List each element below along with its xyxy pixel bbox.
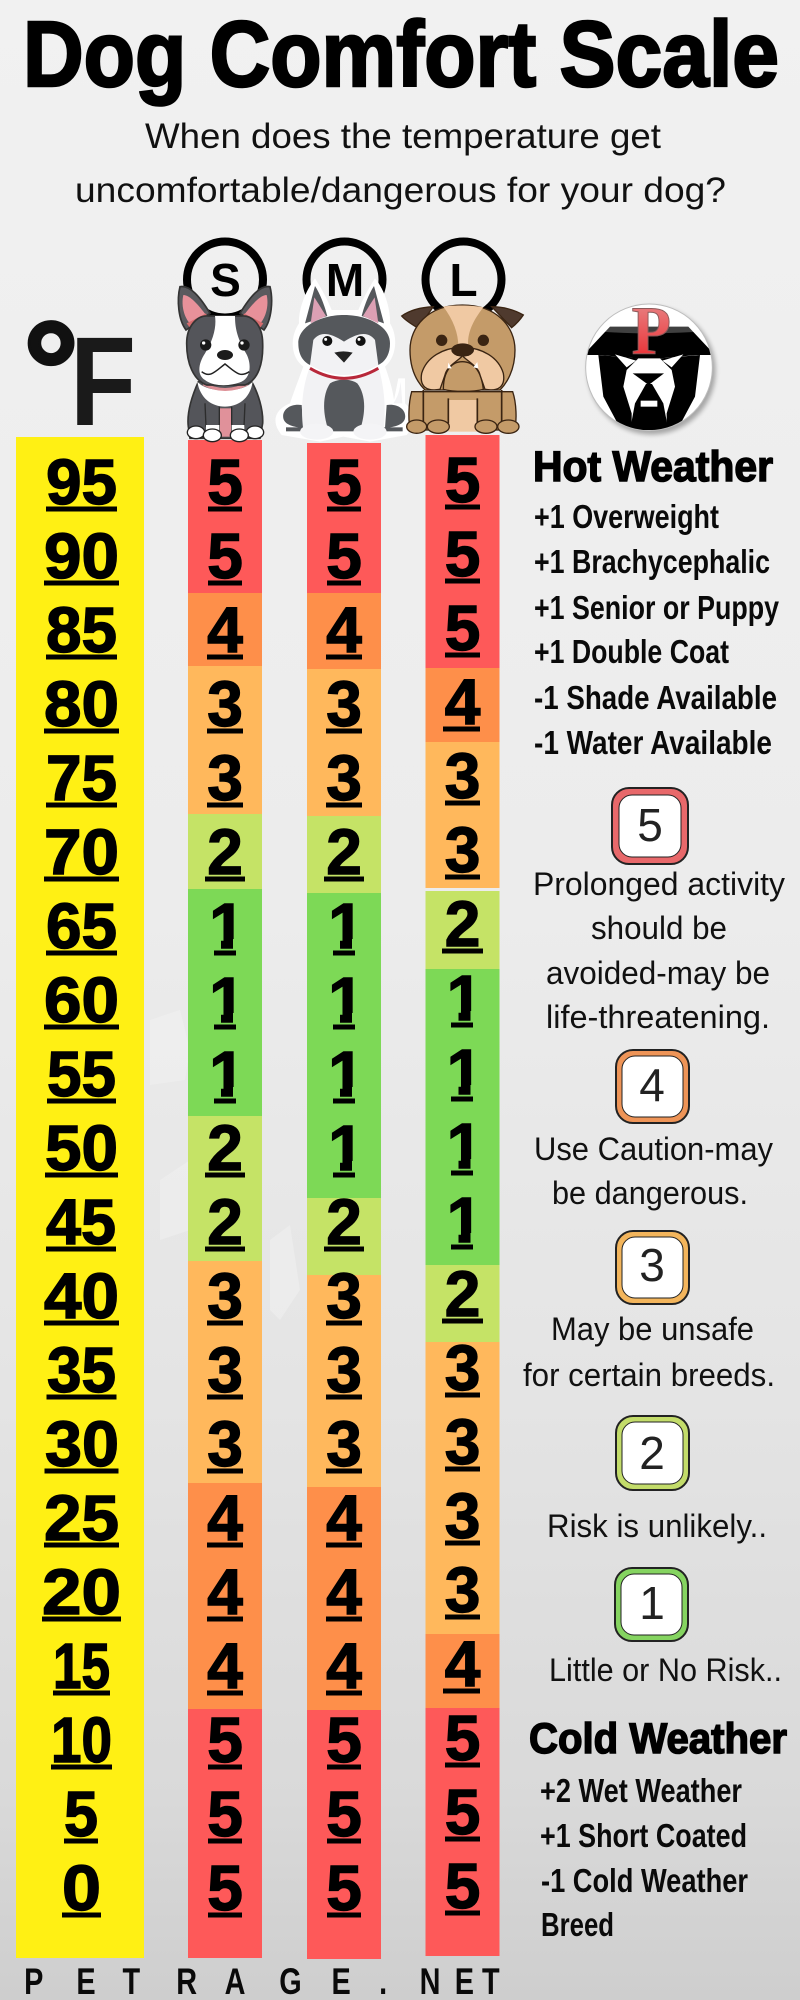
column: medium dogs: 5 xyxy=(326,1778,362,1850)
column: medium dogs: 5 xyxy=(326,1704,362,1776)
column: medium dogs: 3 xyxy=(326,1408,362,1480)
legend: level 1: 1 xyxy=(639,1577,665,1629)
panel: hot weather modifiers xyxy=(533,443,780,761)
column: large dogs: 3 xyxy=(445,740,480,812)
column: small dogs: 1 xyxy=(209,1038,245,1110)
subtitle xyxy=(75,117,726,210)
column: large dogs: 1 xyxy=(447,962,482,1034)
legend: level 3: for certain breeds. xyxy=(523,1357,775,1393)
column: small dogs: 5 xyxy=(207,1704,243,1776)
column: large dogs: 3 xyxy=(445,1554,480,1626)
panel: hot weather modifiers: +1 Double Coat xyxy=(534,633,729,670)
legend: level 4: Use Caution-may xyxy=(534,1131,773,1167)
temperature column xyxy=(16,437,144,1958)
temperature column: 55 xyxy=(47,1038,116,1110)
icon: large dog xyxy=(402,305,523,433)
size badges S M L: S xyxy=(210,254,241,306)
column: medium dogs: 3 xyxy=(326,1260,362,1332)
column: large dogs: 3 xyxy=(445,1332,480,1404)
column: small dogs: 5 xyxy=(207,446,243,518)
legend: level 5: life-threatening. xyxy=(546,999,770,1035)
legend: level 4: be dangerous. xyxy=(552,1175,748,1211)
temperature column: 65 xyxy=(46,890,117,962)
column: large dogs: 4 xyxy=(445,666,481,738)
unit: degrees Fahrenheit: ° xyxy=(23,292,79,449)
legend: level 5: avoided-may be xyxy=(546,955,770,991)
column: medium dogs: 2 xyxy=(326,816,362,888)
temperature column: 80 xyxy=(44,668,119,740)
legend: level 1 xyxy=(549,1568,782,1688)
subtitle: uncomfortable/dangerous for your dog? xyxy=(75,171,726,210)
column: small dogs: 3 xyxy=(207,742,243,814)
column: large dogs: 5 xyxy=(445,1850,480,1922)
column: small dogs: 4 xyxy=(207,594,243,666)
column: small dogs: 5 xyxy=(207,1778,243,1850)
icon: small dog xyxy=(178,287,272,442)
column: medium dogs: 4 xyxy=(326,1556,362,1628)
column: small dogs: 5 xyxy=(207,1852,243,1924)
legend: level 3: May be unsafe xyxy=(551,1311,754,1347)
temperature column: 30 xyxy=(45,1408,119,1480)
legend: level 4: 4 xyxy=(639,1059,665,1111)
column: medium dogs: 3 xyxy=(326,1334,362,1406)
temperature column: 70 xyxy=(44,816,119,888)
heading: hot weather: Hot Weather xyxy=(533,443,773,491)
column: large dogs: 1 xyxy=(447,1184,482,1256)
temperature column: 45 xyxy=(46,1186,116,1258)
temperature column: 5 xyxy=(64,1778,98,1850)
column: large dogs: 1 xyxy=(447,1110,482,1182)
legend: level 5 xyxy=(533,788,785,1035)
temperature column: 40 xyxy=(44,1260,119,1332)
column: small dogs: 5 xyxy=(207,520,243,592)
size badges S M L xyxy=(187,242,502,318)
temperature column: 0 xyxy=(62,1852,101,1924)
column: medium dogs: 1 xyxy=(328,964,364,1036)
panel: cold weather modifiers xyxy=(529,1715,787,1943)
legend: level 5: should be xyxy=(591,910,727,946)
column: small dogs: 3 xyxy=(207,1408,243,1480)
column: small dogs: 4 xyxy=(207,1556,243,1628)
column: small dogs: 3 xyxy=(207,1260,243,1332)
temperature column: 60 xyxy=(44,964,119,1036)
column: small dogs: 1 xyxy=(209,890,245,962)
legend: level 5: 5 xyxy=(637,799,663,851)
column: medium dogs: 1 xyxy=(328,890,364,962)
temperature column: 85 xyxy=(46,594,117,666)
temperature column: 25 xyxy=(44,1482,119,1554)
column: large dogs: 3 xyxy=(445,814,480,886)
legend: level 2: 2 xyxy=(639,1427,665,1479)
column: medium dogs: 3 xyxy=(326,742,362,814)
legend: level 3 xyxy=(523,1231,775,1393)
legend: level 2: Risk is unlikely.. xyxy=(547,1508,767,1544)
column: large dogs: 5 xyxy=(445,1776,480,1848)
column: large dogs: 4 xyxy=(445,1628,481,1700)
temperature column: 50 xyxy=(45,1112,118,1184)
column: small dogs: 4 xyxy=(207,1482,243,1554)
column: large dogs xyxy=(426,435,500,1956)
size badges S M L: L xyxy=(449,254,478,306)
temperature column: 15 xyxy=(53,1630,110,1702)
column: medium dogs: 1 xyxy=(328,1038,364,1110)
temperature column: 90 xyxy=(44,520,119,592)
column: large dogs: 5 xyxy=(445,444,480,516)
temperature column: 75 xyxy=(46,742,117,814)
column: large dogs: 1 xyxy=(447,1036,482,1108)
legend: level 1: Little or No Risk.. xyxy=(549,1652,782,1688)
column: small dogs: 4 xyxy=(207,1630,243,1702)
column: large dogs: 5 xyxy=(445,518,480,590)
column: small dogs: 1 xyxy=(209,964,245,1036)
heading: cold weather: Cold Weather xyxy=(529,1715,787,1763)
column: medium dogs: 2 xyxy=(326,1186,362,1258)
unit: degrees Fahrenheit: F xyxy=(70,311,136,452)
temperature column: 35 xyxy=(47,1334,116,1406)
size badges S M L: M xyxy=(326,254,364,306)
column: small dogs: 2 xyxy=(207,1186,243,1258)
column: medium dogs: 4 xyxy=(326,1482,362,1554)
icon: medium dog xyxy=(275,278,413,442)
column: medium dogs xyxy=(307,443,381,1959)
panel: hot weather modifiers: +1 Overweight xyxy=(534,498,719,535)
legend: level 5: Prolonged activity xyxy=(533,866,785,902)
logo: bulldog badge: P xyxy=(632,292,671,368)
temperature column: 95 xyxy=(46,446,117,518)
temperature column: 10 xyxy=(51,1704,112,1776)
column: large dogs: 3 xyxy=(445,1406,480,1478)
column: small dogs xyxy=(188,440,262,1958)
column: medium dogs: 1 xyxy=(328,1112,364,1184)
column: large dogs: 3 xyxy=(445,1480,480,1552)
column: medium dogs: 5 xyxy=(326,1852,362,1924)
column: medium dogs: 4 xyxy=(326,594,362,666)
column: small dogs: 3 xyxy=(207,1334,243,1406)
column: large dogs: 5 xyxy=(445,592,480,664)
column: small dogs: 2 xyxy=(207,1112,243,1184)
panel: cold weather modifiers: +2 Wet Weather xyxy=(540,1772,742,1809)
subtitle: When does the temperature get xyxy=(145,117,661,156)
legend: level 3: 3 xyxy=(639,1239,665,1291)
column: small dogs: 2 xyxy=(207,816,243,888)
panel: cold weather modifiers: -1 Cold Weather xyxy=(541,1862,748,1899)
panel: cold weather modifiers: +1 Short Coated xyxy=(540,1817,747,1854)
column: medium dogs: 5 xyxy=(326,520,362,592)
legend: level 4 xyxy=(534,1050,773,1211)
column: small dogs: 3 xyxy=(207,668,243,740)
unit: degrees Fahrenheit xyxy=(23,292,136,452)
column: medium dogs: 4 xyxy=(326,1630,362,1702)
column: medium dogs: 3 xyxy=(326,668,362,740)
column: medium dogs: 5 xyxy=(326,446,362,518)
column: large dogs: 2 xyxy=(445,888,480,960)
column: large dogs: 2 xyxy=(445,1258,480,1330)
temperature column: 20 xyxy=(42,1556,121,1628)
column: large dogs: 5 xyxy=(445,1702,480,1774)
logo: bulldog badge xyxy=(585,304,718,438)
panel: cold weather modifiers: Breed xyxy=(541,1906,614,1943)
legend: level 2 xyxy=(547,1416,767,1544)
